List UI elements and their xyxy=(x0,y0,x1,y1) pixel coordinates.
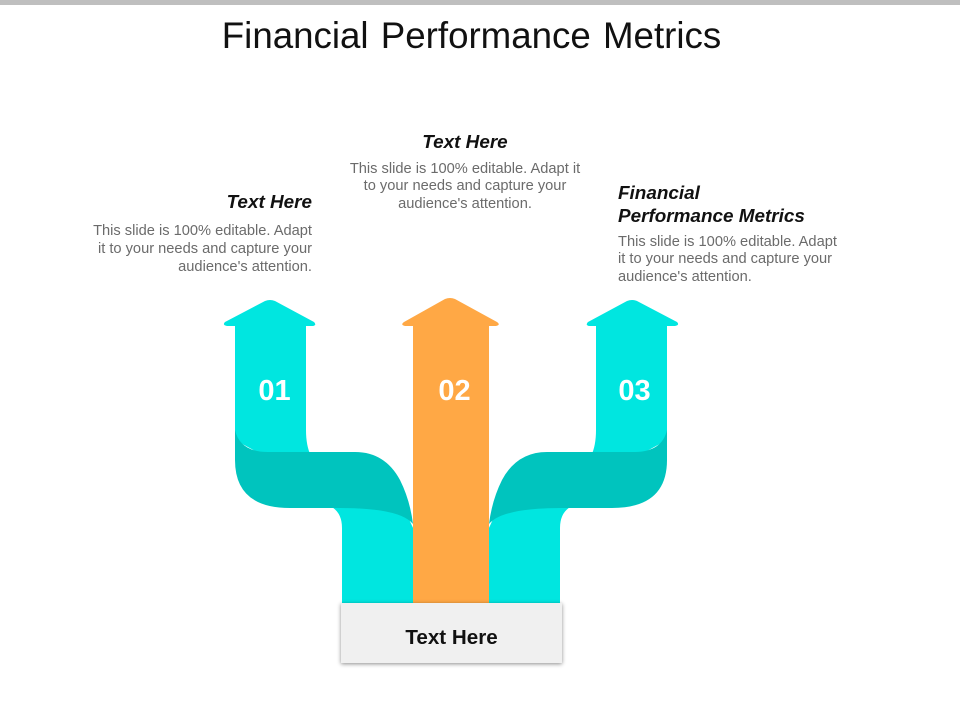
right heading: Performance Metrics xyxy=(618,206,805,227)
center body: audience's attention. xyxy=(398,196,532,212)
base box: Text Here xyxy=(405,626,498,649)
right body xyxy=(618,234,837,285)
center body: to your needs and capture your xyxy=(364,178,566,194)
title: Financial Performance Metrics xyxy=(222,15,721,56)
arrow 03 xyxy=(488,300,678,603)
right body: This slide is 100% editable. Adapt xyxy=(618,234,837,250)
text block: left xyxy=(93,192,312,275)
text block: right xyxy=(618,183,837,285)
center heading: Text Here xyxy=(422,132,508,153)
right heading: Financial xyxy=(618,183,700,204)
left body: This slide is 100% editable. Adapt xyxy=(93,223,312,239)
base box xyxy=(341,603,562,663)
right body: audience's attention. xyxy=(618,269,752,285)
right body: it to your needs and capture your xyxy=(618,251,832,267)
arrow 01 xyxy=(224,300,414,603)
left body: it to your needs and capture your xyxy=(98,241,312,257)
right heading xyxy=(618,183,805,227)
arrow 02 xyxy=(402,298,499,603)
number 03: 03 xyxy=(618,375,651,407)
text block: center xyxy=(350,132,580,212)
left body xyxy=(93,223,312,275)
center body: This slide is 100% editable. Adapt it xyxy=(350,160,580,176)
center body xyxy=(350,160,580,212)
left heading: Text Here xyxy=(227,192,312,213)
left body: audience's attention. xyxy=(178,259,312,275)
number 01: 01 xyxy=(258,375,291,407)
number 02: 02 xyxy=(438,375,471,407)
